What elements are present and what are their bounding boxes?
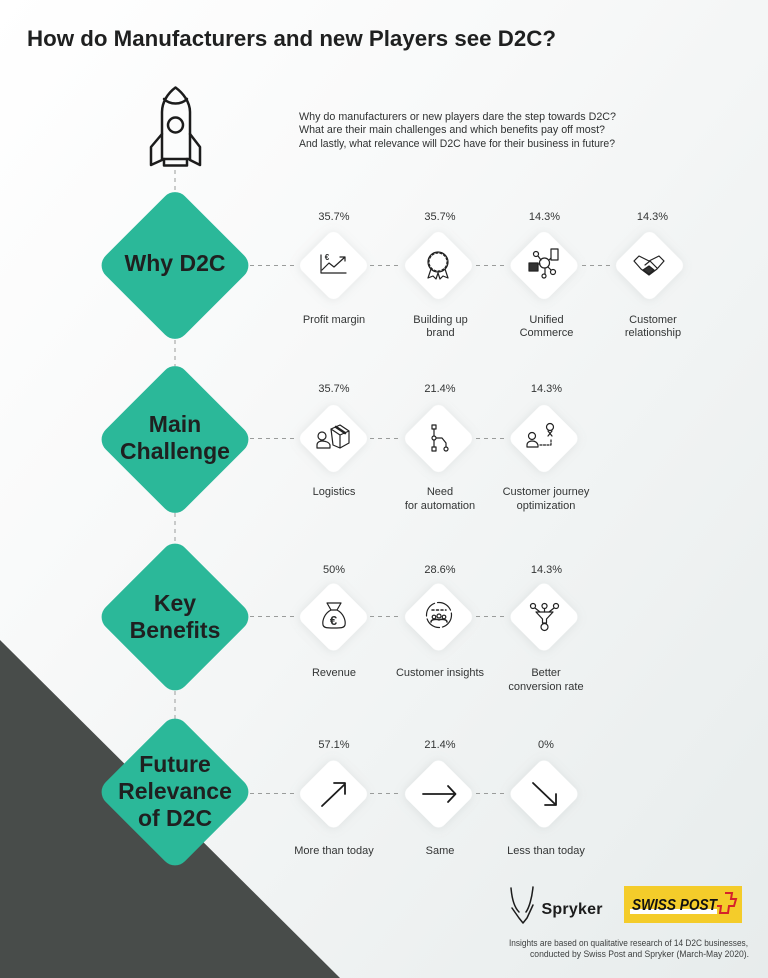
- heading diamond: Future Relevance of D2C: Relevance: [118, 778, 232, 804]
- item: Same: Same: [426, 845, 454, 857]
- item: Building up brand: Building up: [413, 314, 468, 326]
- item: Customer insights: [396, 564, 485, 679]
- item: Profit margin: 35.7%: [318, 211, 350, 223]
- icon: profit chart: [321, 255, 346, 273]
- item: More than today: [294, 739, 374, 857]
- panel: Future Relevance of D2C: [96, 713, 585, 871]
- item: Less than today: [507, 739, 585, 857]
- item: Customer relationship: Customer: [629, 314, 677, 326]
- footnote: Insights are based on qualitative research of 14 D2C businesses,: [509, 938, 748, 948]
- icon: money bag: [323, 603, 345, 628]
- item: Building up brand: brand: [426, 327, 455, 339]
- item: Customer insights: 28.6%: [424, 564, 456, 576]
- item: Revenue: Revenue: [312, 667, 356, 679]
- icon: arrow right: [423, 786, 456, 802]
- item: Revenue: [297, 564, 370, 679]
- item: Need for automation: for automation: [405, 500, 475, 512]
- item: Need for automation: 21.4%: [424, 383, 456, 395]
- row connectors: [250, 266, 614, 794]
- logo: Swiss Post: [624, 886, 742, 923]
- item: Revenue: €: [330, 613, 337, 628]
- item: Need for automation: Need: [427, 486, 453, 498]
- panel: Key Benefits: [96, 538, 584, 696]
- item: Unified Commerce: [507, 211, 581, 339]
- item: Profit margin: €: [325, 253, 330, 262]
- item: Better conversion rate: conversion rate: [508, 681, 584, 693]
- icon: customers in cycle: [426, 602, 452, 628]
- panel: Main Challenge: [96, 360, 590, 519]
- item: More than today: 57.1%: [318, 739, 350, 751]
- vertical connector: [174, 170, 176, 719]
- footnote: [509, 938, 749, 959]
- item: Same: [402, 739, 475, 857]
- heading diamond: Main Challenge: Challenge: [120, 438, 230, 464]
- item: Better conversion rate: 14.3%: [531, 564, 562, 576]
- item: Customer insights: Customer insights: [396, 667, 485, 679]
- item: Logistics: Logistics: [313, 486, 356, 498]
- icon: flow diagram: [432, 425, 448, 451]
- icon: award rosette: [428, 252, 448, 279]
- item: Same: 21.4%: [424, 739, 456, 751]
- item: Better conversion rate: Better: [531, 667, 561, 679]
- icon: handshake: [634, 256, 664, 275]
- heading diamond: Key Benefits: Key: [154, 590, 196, 616]
- dark corner triangle: [0, 640, 340, 978]
- intro text: Why do manufacturers or new players dare the step towards D2C?: [299, 111, 616, 123]
- logo: Spryker: [511, 887, 602, 923]
- icon: antelope head: [511, 887, 533, 923]
- item: Customer journey optimization: optimization: [517, 500, 575, 512]
- item: Need for automation: [402, 383, 475, 512]
- item: Unified Commerce: Commerce: [520, 327, 573, 339]
- icon: connected channels: [529, 249, 558, 278]
- heading diamond: Key Benefits: [96, 538, 254, 696]
- heading diamond: Why D2C: Why D2C: [125, 250, 225, 276]
- icon: conversion funnel: [530, 604, 558, 630]
- item: More than today: More than today: [294, 845, 374, 857]
- icon: person with parcel: [317, 425, 349, 448]
- title: How do Manufacturers and new Players see D2C?: [27, 26, 556, 51]
- item: Unified Commerce: 14.3%: [529, 211, 560, 223]
- item: Profit margin: Profit margin: [303, 314, 365, 326]
- item: Customer journey optimization: [503, 383, 590, 512]
- heading diamond: Future Relevance of D2C: of D2C: [138, 805, 212, 831]
- item: Better conversion rate: [507, 564, 584, 693]
- footnote: conducted by Swiss Post and Spryker (March-May 2020).: [530, 949, 749, 959]
- icon: customer journey: [527, 424, 554, 447]
- heading diamond: Key Benefits: Benefits: [130, 617, 220, 643]
- heading diamond: Main Challenge: [96, 360, 254, 519]
- item: Building up brand: 35.7%: [424, 211, 456, 223]
- item: Profit margin: [297, 211, 370, 326]
- intro text: And lastly, what relevance will D2C have for their business in future?: [299, 138, 615, 150]
- item: Unified Commerce: Unified: [529, 314, 564, 326]
- heading diamond: Why D2C: [96, 186, 254, 345]
- heading diamond: Future Relevance of D2C: Future: [139, 751, 211, 777]
- item: Customer relationship: 14.3%: [637, 211, 668, 223]
- item: Revenue: 50%: [323, 564, 345, 576]
- heading diamond: Future Relevance of D2C: [96, 713, 254, 871]
- item: Less than today: 0%: [538, 739, 554, 751]
- intro text: What are their main challenges and which benefits pay off most?: [299, 124, 605, 136]
- icon: arrow up-right: [322, 783, 345, 806]
- item: Logistics: 35.7%: [318, 383, 350, 395]
- heading diamond: Main Challenge: Main: [149, 411, 201, 437]
- item: Less than today: Less than today: [507, 845, 585, 857]
- item: Customer journey optimization: 14.3%: [531, 383, 562, 395]
- logo: Swiss Post: SWISS POST: [632, 897, 718, 914]
- icon: rocket: [151, 88, 200, 166]
- icon: arrow down-right: [533, 783, 556, 805]
- item: Building up brand: [402, 211, 475, 339]
- item: Logistics: [297, 383, 370, 498]
- intro text: [299, 111, 616, 150]
- item: Customer journey optimization: Customer journey: [503, 486, 590, 498]
- item: Customer relationship: [613, 211, 686, 339]
- logo: Spryker: Spryker: [542, 901, 602, 918]
- icon: swiss cross: [717, 893, 736, 913]
- panel: Why D2C: [96, 186, 686, 345]
- item: Customer relationship: relationship: [625, 327, 681, 339]
